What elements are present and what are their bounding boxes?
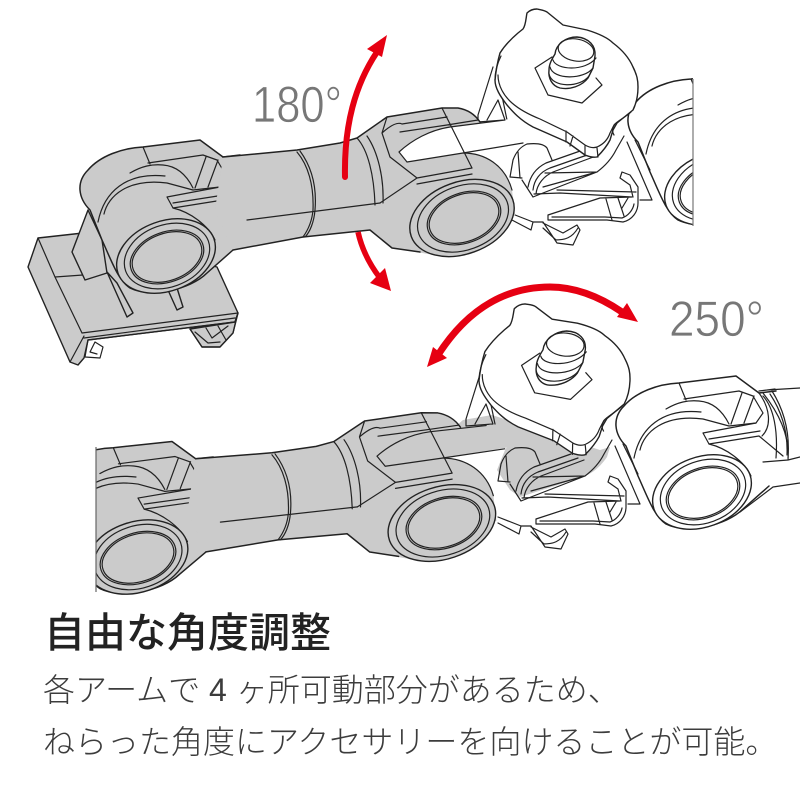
mechanism behind arm (top) xyxy=(478,67,652,245)
quick release plate (top) xyxy=(495,9,638,157)
quick release plate (bottom) xyxy=(477,299,632,460)
arm and joints (top) xyxy=(80,108,535,306)
far right clevis (top) xyxy=(627,78,693,226)
clip edge: far right (top) xyxy=(692,79,694,226)
body text line 2: ねらった角度にアクセサリーを向けることが可能。 xyxy=(43,724,777,760)
mounting plate base xyxy=(28,233,238,365)
label: 180 degrees: 180° xyxy=(252,76,342,133)
heading: 自由な角度調整 xyxy=(44,610,331,656)
body text line 1: 各アームで 4 ヶ所可動部分があるため、 xyxy=(43,672,620,708)
clip edge: left (bottom) xyxy=(95,447,97,592)
label: 250 degrees: 250° xyxy=(669,291,764,347)
arm and joints (bottom) xyxy=(96,412,510,595)
arrow: double-headed red arc xyxy=(427,287,638,367)
arm left clevis wall xyxy=(72,210,107,280)
arrow: upward red arrow xyxy=(345,35,387,177)
illustration: top arm with 180 degree rotation xyxy=(27,8,694,366)
arrow: downward red arrow xyxy=(358,232,391,291)
gray link below plate (bottom) xyxy=(420,415,610,497)
mechanism behind arm (bottom) xyxy=(466,371,640,549)
far right clevis and arm (bottom) xyxy=(616,376,800,542)
illustration: bottom arm with 250 degree rotation xyxy=(48,299,800,612)
